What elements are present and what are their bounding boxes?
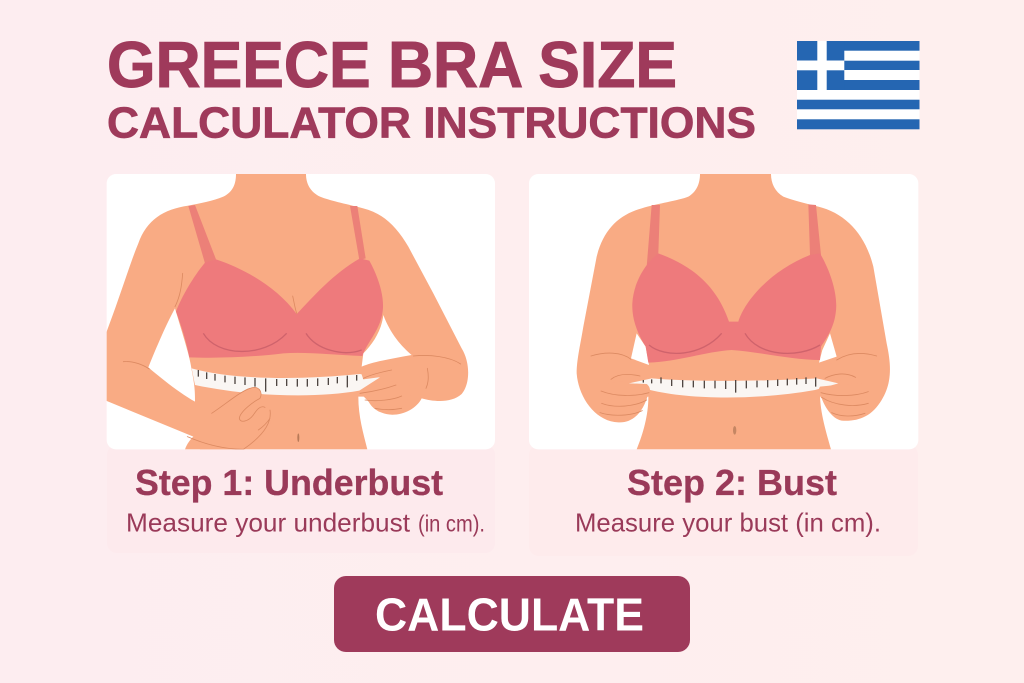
step 1 description: (in cm). <box>418 511 485 537</box>
title <box>107 28 756 147</box>
hands <box>123 273 461 449</box>
caption card background <box>529 445 918 556</box>
icon: Greek flag <box>797 41 920 129</box>
calculate button <box>334 576 690 652</box>
caption card background <box>107 445 495 553</box>
bra <box>176 205 383 358</box>
step 1 heading: Step 1: Underbust <box>135 462 443 503</box>
measuring tape <box>629 377 838 397</box>
measuring tape <box>192 368 380 395</box>
illustration: underbust measurement <box>106 174 495 449</box>
title: CALCULATOR INSTRUCTIONS <box>107 98 756 147</box>
hands <box>591 353 877 435</box>
step 2 heading: Step 2: Bust <box>627 462 837 503</box>
step 2 description: Measure your bust (in cm). <box>575 508 881 538</box>
illustration: bust measurement <box>529 174 918 449</box>
panel: step 1 underbust <box>106 174 495 553</box>
bra <box>632 204 836 363</box>
infographic canvas <box>106 41 920 652</box>
step 1 description: Measure your underbust <box>126 508 411 538</box>
calculate button: CALCULATE <box>375 588 644 640</box>
panel: step 2 bust <box>529 174 918 556</box>
title: GREECE BRA SIZE <box>107 28 677 101</box>
